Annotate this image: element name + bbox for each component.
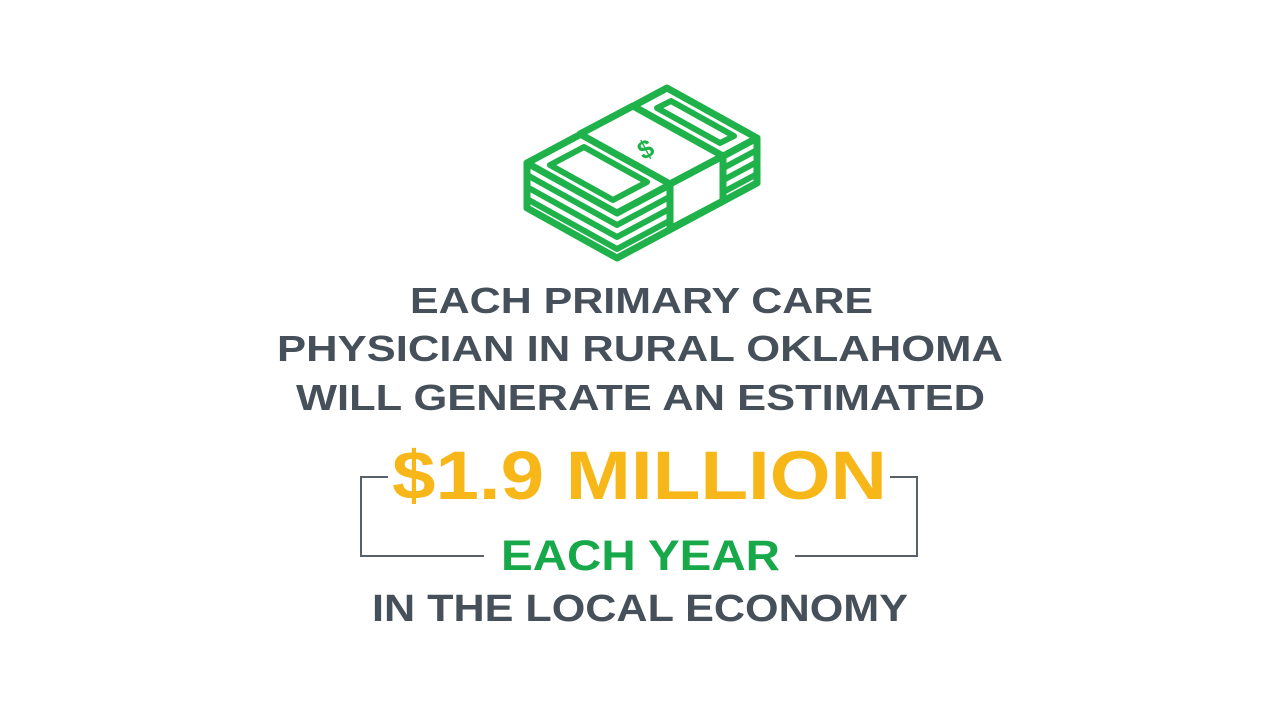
each year: EACH YEAR bbox=[501, 532, 780, 580]
headline text: PHYSICIAN IN RURAL OKLAHOMA bbox=[277, 328, 1003, 369]
headline text: EACH PRIMARY CARE bbox=[410, 280, 873, 321]
top face bbox=[527, 88, 757, 213]
bracket frame bbox=[361, 477, 917, 556]
big number: $1.9 MILLION bbox=[392, 437, 887, 514]
band on top bbox=[580, 106, 723, 184]
headline text bbox=[277, 280, 1003, 418]
band on front bbox=[670, 156, 723, 229]
headline text: WILL GENERATE AN ESTIMATED bbox=[296, 377, 985, 418]
icon: money stack bbox=[527, 88, 757, 258]
inner note rectangles bbox=[550, 147, 647, 200]
icon: dollar sign: $ bbox=[632, 132, 659, 166]
local economy line: IN THE LOCAL ECONOMY bbox=[372, 588, 908, 630]
stack side outline bbox=[527, 138, 757, 258]
